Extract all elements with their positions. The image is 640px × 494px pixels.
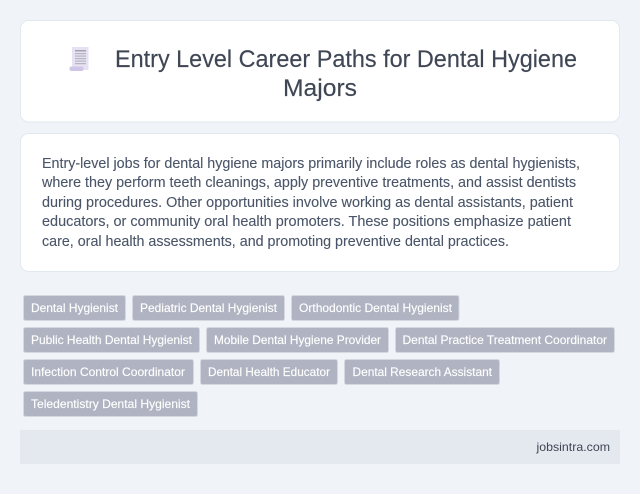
footer (20, 430, 620, 464)
icon: paper scroll (70, 47, 88, 71)
tag: Dental Hygienist (31, 301, 119, 315)
tag (24, 360, 194, 384)
tag: Pediatric Dental Hygienist (140, 301, 278, 315)
tag (24, 328, 200, 352)
tag (200, 360, 338, 384)
tag (344, 360, 500, 384)
tag: Mobile Dental Hygiene Provider (214, 333, 381, 347)
panel: header (20, 20, 620, 122)
tag: Orthodontic Dental Hygienist (299, 301, 453, 315)
text block: description (41, 156, 580, 250)
footer: jobsintra.com (535, 440, 610, 454)
tag: Dental Practice Treatment Coordinator (402, 333, 607, 347)
tag: Teledentistry Dental Hygienist (31, 397, 191, 411)
panel: description (20, 134, 620, 272)
tag: Dental Research Assistant (352, 365, 493, 379)
title: Majors (283, 75, 357, 102)
tag: Dental Health Educator (208, 365, 330, 379)
tag (24, 392, 198, 416)
title: Entry Level Career Paths for Dental Hygiene (115, 46, 577, 73)
title (115, 46, 577, 102)
tag (292, 296, 459, 320)
tag (206, 328, 388, 352)
tag: Infection Control Coordinator (31, 365, 185, 379)
tag: Public Health Dental Hygienist (31, 333, 193, 347)
tag list (24, 296, 614, 416)
tag (396, 328, 614, 352)
tag (132, 296, 284, 320)
text block: description: Entry-level jobs for dental hygiene majors primarily include roles as dental hygienists, (42, 156, 580, 172)
text block: description: care, oral health assessments, and promoting preventive dental practices. (42, 234, 509, 250)
tag (24, 296, 126, 320)
text block: description: where they perform teeth cleanings, apply preventive treatments, and assist dentists (41, 175, 576, 191)
text block: description: during procedures. Other opportunities involve working as dental assistants, patient (42, 195, 573, 211)
text block: description: educators, or community oral health promoters. These positions emphasize patient (42, 214, 571, 230)
